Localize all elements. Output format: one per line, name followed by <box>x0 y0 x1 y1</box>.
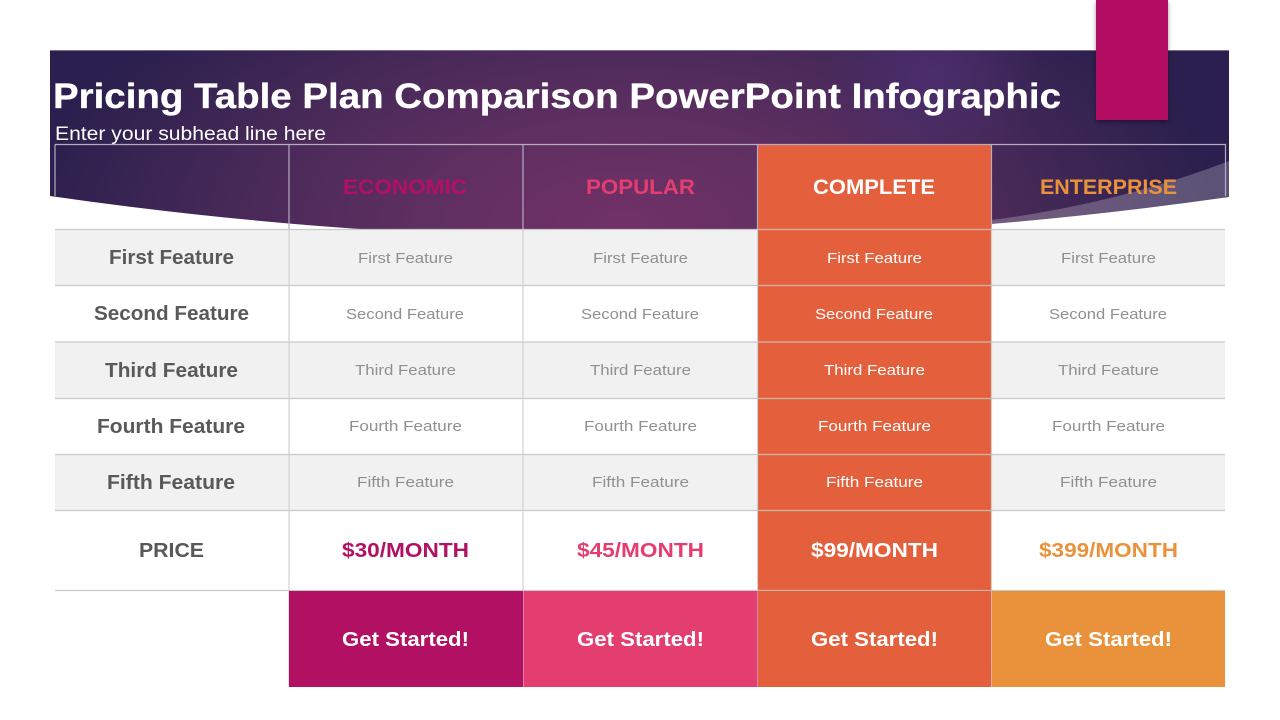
row stripes <box>55 229 1225 510</box>
enterprise column features: Fifth Feature <box>1060 474 1157 491</box>
plan headers: POPULAR <box>586 176 695 199</box>
price row <box>139 540 1178 562</box>
complete column features: Fifth Feature <box>826 474 923 491</box>
popular column features: First Feature <box>593 250 688 267</box>
economic column features: Third Feature <box>355 362 456 379</box>
button: enterprise: Get Started! <box>1045 629 1172 651</box>
popular column features: Fifth Feature <box>592 474 689 491</box>
enterprise column features: Second Feature <box>1049 306 1167 323</box>
plan headers <box>343 176 1177 199</box>
economic column features <box>346 250 464 491</box>
subhead: Enter your subhead line here <box>55 124 326 145</box>
price row: $99/MONTH <box>811 540 938 562</box>
magenta bookmark tab <box>1096 0 1168 120</box>
complete column features: Third Feature <box>824 362 925 379</box>
complete column features: Second Feature <box>815 306 933 323</box>
enterprise column features: Fourth Feature <box>1052 418 1165 435</box>
button: complete <box>758 591 992 687</box>
plan headers: ECONOMIC <box>343 176 467 199</box>
plan headers: ENTERPRISE <box>1040 176 1177 199</box>
enterprise column features <box>1049 250 1167 491</box>
price row: $399/MONTH <box>1039 540 1178 562</box>
feature row labels <box>94 247 249 494</box>
complete column fill <box>757 144 992 590</box>
popular column features: Fourth Feature <box>584 418 697 435</box>
button: popular: Get Started! <box>577 629 704 651</box>
button: complete: Get Started! <box>811 629 938 651</box>
title: Pricing Table Plan Comparison PowerPoint Infographic <box>53 77 1061 116</box>
pricing table <box>55 144 1226 687</box>
button: economic <box>289 591 523 687</box>
price row: $45/MONTH <box>577 540 704 562</box>
complete column features: Fourth Feature <box>818 418 931 435</box>
enterprise column features: Third Feature <box>1058 362 1159 379</box>
complete column features <box>815 250 933 491</box>
feature row labels: Third Feature <box>105 360 238 382</box>
price row: $30/MONTH <box>342 540 469 562</box>
button: enterprise <box>992 591 1225 687</box>
button: economic: Get Started! <box>342 629 469 651</box>
feature row labels: Fourth Feature <box>97 416 245 438</box>
table grid <box>55 144 1226 687</box>
enterprise column features: First Feature <box>1061 250 1156 267</box>
popular column features <box>581 250 699 491</box>
economic column features: Fourth Feature <box>349 418 462 435</box>
button: popular <box>524 591 758 687</box>
feature row labels: First Feature <box>109 247 234 269</box>
plan headers: COMPLETE <box>813 176 935 199</box>
feature row labels: Fifth Feature <box>107 472 235 494</box>
economic column features: Fifth Feature <box>357 474 454 491</box>
complete column features: First Feature <box>827 250 922 267</box>
price row: PRICE <box>139 540 204 562</box>
feature row labels: Second Feature <box>94 303 249 325</box>
header banner <box>50 50 1229 239</box>
popular column features: Third Feature <box>590 362 691 379</box>
light swoosh on banner <box>992 161 1229 226</box>
economic column features: First Feature <box>358 250 453 267</box>
economic column features: Second Feature <box>346 306 464 323</box>
popular column features: Second Feature <box>581 306 699 323</box>
